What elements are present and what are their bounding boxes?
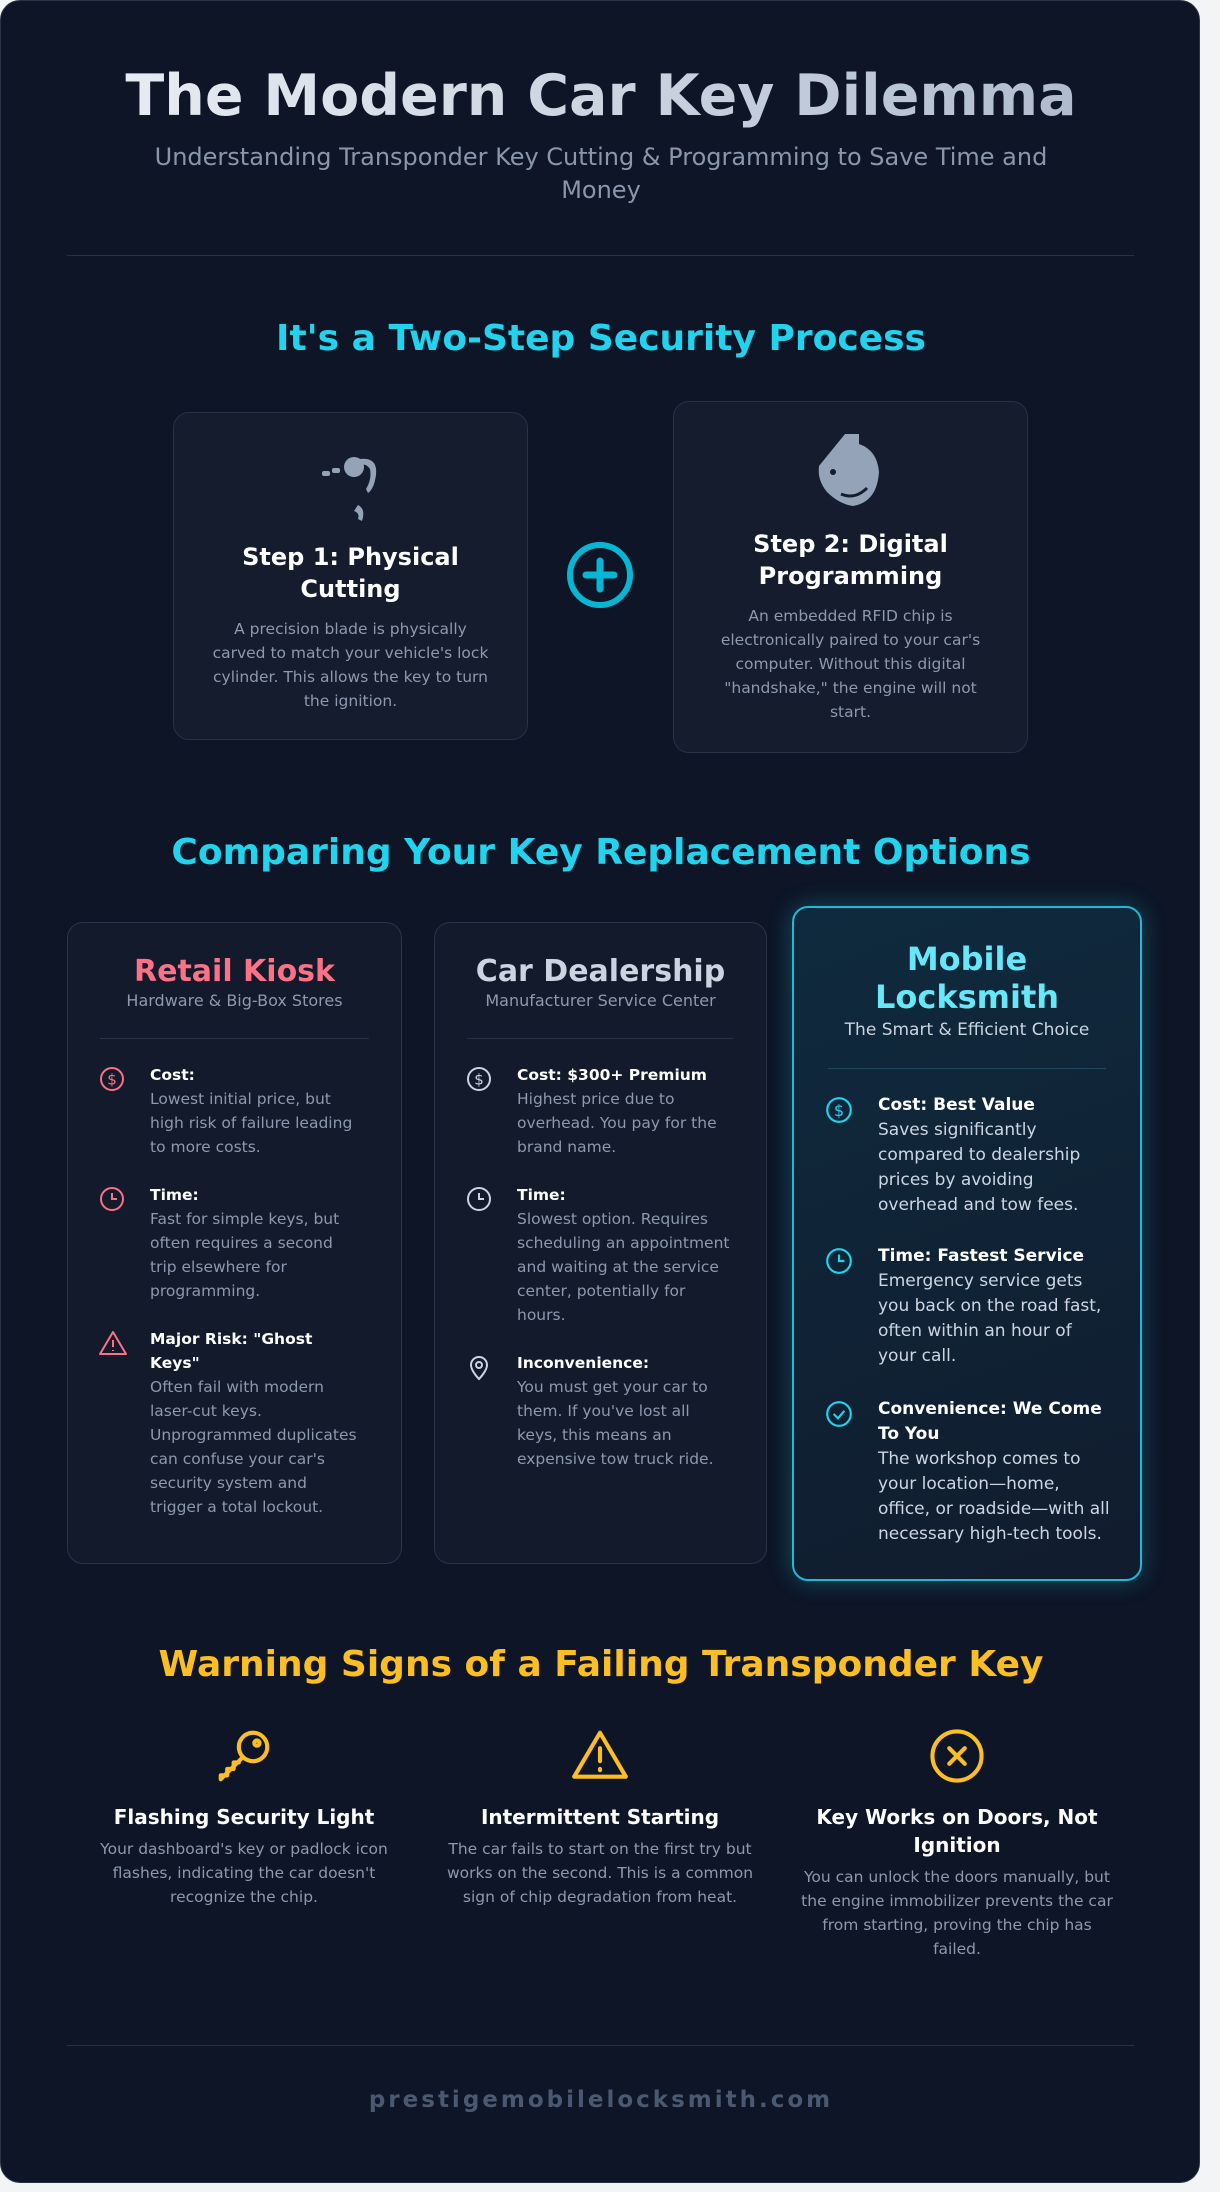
icon: plus <box>567 542 633 608</box>
item: time: Emergency service gets you back on the road fast, often within an hour of your call. <box>878 1271 1101 1366</box>
heading: two-step process: It's a Two-Step Security Process <box>276 318 926 359</box>
panel: step 2: Step 2: Digital <box>753 530 948 558</box>
warning: doors not ignition <box>801 1729 1113 1958</box>
panel: step 1: Cutting <box>300 575 401 603</box>
item: cost: Cost: $300+ Premium <box>517 1066 707 1084</box>
icon: x circle <box>930 1729 984 1783</box>
item: cost <box>826 1095 1080 1215</box>
item: risk: Often fail with modern laser-cut keys. Unprogrammed duplicates can confuse your car's security system and trigger a total lockout. <box>150 1378 357 1516</box>
item: cost: Highest price due to overhead. You pay for the brand name. <box>517 1090 717 1156</box>
panel: mobile locksmith: Mobile <box>907 940 1027 978</box>
item: cost: $ <box>474 1070 484 1088</box>
item: inconvenience <box>470 1354 714 1468</box>
item: cost: Saves significantly compared to dealership prices by avoiding overhead and tow fees. <box>878 1120 1080 1215</box>
panel: dealership: Car Dealership <box>476 954 725 989</box>
title: The Modern Car Key Dilemma <box>125 63 1077 129</box>
item: convenience <box>826 1399 1110 1544</box>
item: cost: $ <box>107 1070 117 1088</box>
panel: mobile locksmith: Locksmith <box>875 978 1059 1016</box>
item: time: Fast for simple keys, but often requires a second trip elsewhere for programming. <box>150 1210 339 1300</box>
panel: dealership: Manufacturer Service Center <box>485 991 716 1010</box>
icon: chip <box>818 434 879 506</box>
item: convenience: The workshop comes to your location—home, office, or roadside—with all necessary high-tech tools. <box>878 1449 1110 1544</box>
item: convenience: Convenience: We Come To You <box>878 1399 1102 1444</box>
panel: retail kiosk: Hardware & Big-Box Stores <box>126 991 343 1010</box>
item: risk <box>99 1330 357 1516</box>
item: cost: Lowest initial price, but high risk of failure leading to more costs. <box>150 1090 352 1156</box>
item: time <box>467 1186 730 1324</box>
panel: retail kiosk: Retail Kiosk <box>134 954 335 989</box>
icon: cutting <box>322 457 376 521</box>
warning: intermittent starting <box>447 1730 753 1906</box>
item: inconvenience: You must get your car to them. If you've lost all keys, this means an expensive tow truck ride. <box>517 1378 714 1468</box>
icon: key <box>218 1730 270 1782</box>
item: time: Time: Fastest Service <box>878 1246 1084 1266</box>
item: time <box>826 1246 1101 1366</box>
item: cost <box>467 1066 717 1156</box>
warning: doors not ignition: You can unlock the doors manually, but the engine immobilizer prevents the car from starting, proving the chip has failed. <box>801 1868 1113 1958</box>
item: cost <box>100 1066 352 1156</box>
panel: dealership <box>434 922 767 1564</box>
item: time <box>100 1186 339 1300</box>
warning: flashing light: Flashing Security Light <box>114 1805 374 1829</box>
item: inconvenience: Inconvenience: <box>517 1354 649 1372</box>
panel: step 1: A precision blade is physically carved to match your vehicle's lock cylinder. This allows the key to turn the ignition. <box>213 620 488 710</box>
item: cost: Cost: <box>150 1066 195 1084</box>
warning: intermittent starting: The car fails to start on the first try but works on the second. This is a common sign of chip degradation from heat. <box>447 1840 753 1906</box>
panel: step 2 <box>673 401 1028 753</box>
panel: mobile locksmith: The Smart & Efficient Choice <box>845 1020 1089 1040</box>
heading: warning signs: Warning Signs of a Failing Transponder Key <box>159 1644 1043 1685</box>
icon: warning triangle <box>572 1730 628 1779</box>
item: risk: Major Risk: "Ghost Keys" <box>150 1330 312 1372</box>
item: cost: Cost: Best Value <box>878 1095 1035 1115</box>
item: time: Time: <box>150 1186 199 1204</box>
panel: step 2: An embedded RFID chip is electronically paired to your car's computer. Without this digital "handshake," the engine will not start. <box>721 607 980 721</box>
warning: flashing light: Your dashboard's key or padlock icon flashes, indicating the car doesn't recognize the chip. <box>100 1840 388 1906</box>
item: time: Time: <box>517 1186 566 1204</box>
warning: doors not ignition: Key Works on Doors, Not Ignition <box>816 1805 1098 1857</box>
warning: flashing light <box>100 1730 388 1906</box>
warning: intermittent starting: Intermittent Starting <box>481 1805 719 1829</box>
panel: step 2: Programming <box>759 562 942 590</box>
footer: prestigemobilelocksmith.com <box>369 2087 833 2113</box>
panel: step 1: Step 1: Physical <box>242 543 459 571</box>
panel: step 1 <box>173 412 528 740</box>
panel: retail kiosk <box>67 922 402 1564</box>
item: time: Slowest option. Requires scheduling an appointment and waiting at the service center, potentially for hours. <box>517 1210 729 1324</box>
heading: comparing options: Comparing Your Key Replacement Options <box>171 832 1031 873</box>
item: cost: $ <box>834 1101 844 1120</box>
panel: mobile locksmith <box>792 906 1142 1581</box>
subtitle: Understanding Transponder Key Cutting & Programming to Save Time and Money <box>155 143 1047 204</box>
